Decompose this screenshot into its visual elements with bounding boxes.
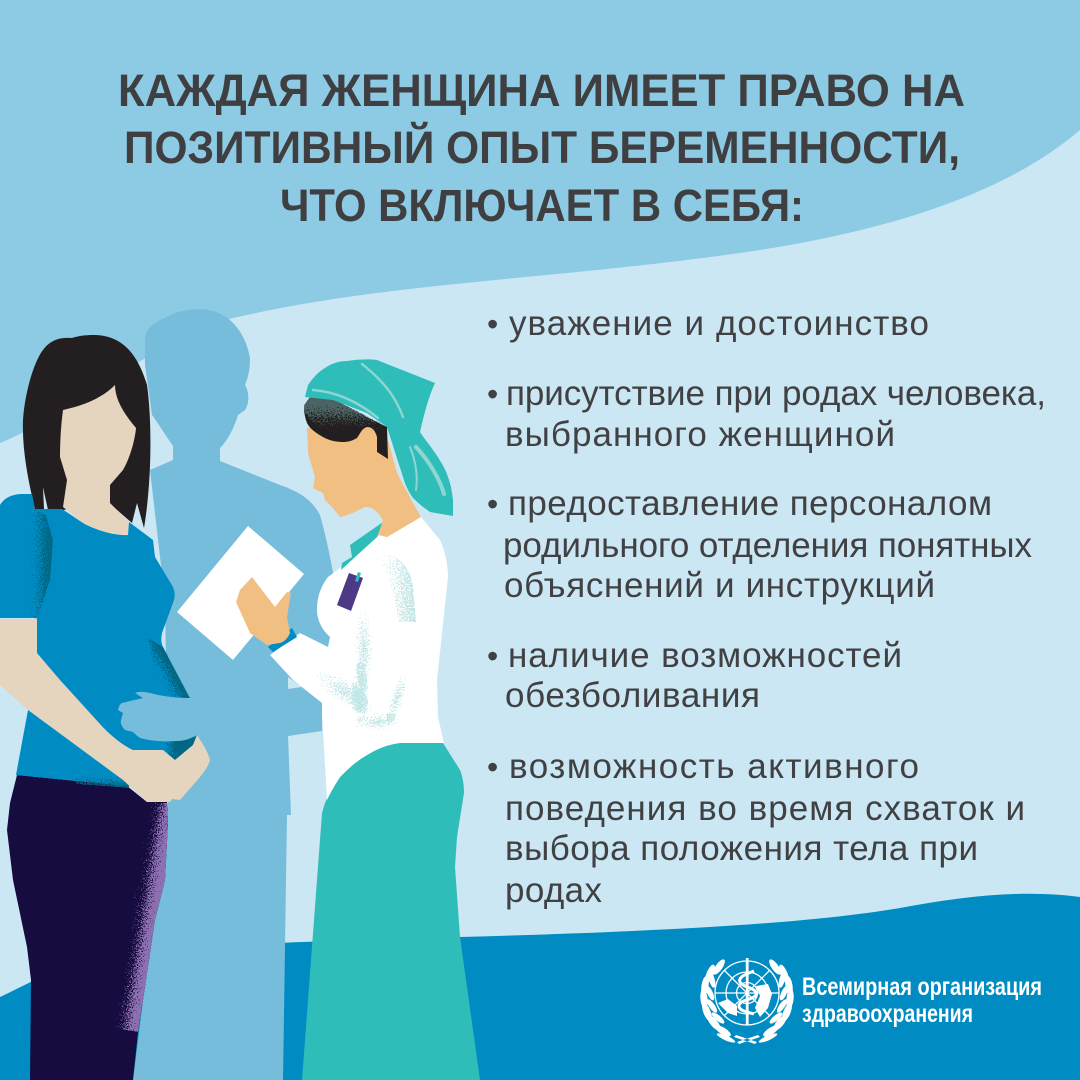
nurse xyxy=(177,359,480,1080)
item: pain relief: • xyxy=(487,638,498,674)
item: respect and dignity: уважение и достоинство xyxy=(509,304,929,343)
item: mobility and birth position: поведения во время схваток и xyxy=(505,789,1025,828)
nurse blouse xyxy=(270,517,448,800)
item: clear communication: объяснений и инструкций xyxy=(504,566,935,605)
item: mobility and birth position xyxy=(487,747,1025,910)
WHO name xyxy=(802,973,1042,1028)
sleeve stipple arm xyxy=(310,608,412,733)
item: clear communication: предоставление персоналом xyxy=(508,484,992,523)
top wave xyxy=(0,0,1080,443)
title xyxy=(118,65,965,231)
pregnant woman xyxy=(0,335,240,1080)
item: respect and dignity: • xyxy=(487,306,498,342)
sleeve stipple shoulder xyxy=(376,555,416,622)
shirt under-hand shading xyxy=(158,737,196,760)
title: ПОЗИТИВНЫЙ ОПЫТ БЕРЕМЕННОСТИ, xyxy=(124,122,960,173)
item: companion of choice: выбранного женщиной xyxy=(505,415,895,454)
man's hand on belly xyxy=(118,692,240,741)
woman's trousers xyxy=(7,775,168,1080)
clipboard paper xyxy=(177,526,304,660)
woman's hair xyxy=(23,335,150,528)
title: ЧТО ВКЛЮЧАЕТ В СЕБЯ: xyxy=(280,180,804,231)
WHO logo xyxy=(699,958,1042,1044)
gap between man's arm and body xyxy=(288,677,302,689)
WHO emblem xyxy=(699,958,795,1044)
nurse face and neck xyxy=(307,420,421,537)
item: pain relief xyxy=(487,636,902,715)
item: mobility and birth position: возможность активного xyxy=(509,747,919,786)
item: mobility and birth position: выбора положения тела при xyxy=(505,829,978,868)
woman's arm xyxy=(0,619,210,802)
scarf highlights xyxy=(313,364,444,494)
item: clear communication xyxy=(487,484,1032,605)
headscarf xyxy=(305,359,453,516)
watch cuff xyxy=(268,628,297,652)
collar xyxy=(341,522,383,570)
item: mobility and birth position: родах xyxy=(505,871,602,910)
nurse skirt xyxy=(302,743,480,1080)
woman's shirt xyxy=(0,494,197,786)
item: pain relief: обезболивания xyxy=(505,676,760,715)
nurse hair xyxy=(304,398,388,459)
WHO name: здравоохранения xyxy=(802,1000,973,1028)
nurse hand xyxy=(236,577,291,645)
item: mobility and birth position: • xyxy=(487,749,498,785)
bottom wave xyxy=(0,894,1080,1080)
man silhouette xyxy=(133,309,340,1080)
shirt sleeve shading xyxy=(24,495,53,620)
item: clear communication: • xyxy=(487,486,498,522)
title: КАЖДАЯ ЖЕНЩИНА ИМЕЕТ ПРАВО НА xyxy=(118,65,965,116)
item: companion of choice xyxy=(487,374,1046,454)
item: clear communication: родильного отделения понятных xyxy=(503,526,1032,565)
item: companion of choice: присутствие при родах человека, xyxy=(506,374,1046,413)
trousers stipple shading xyxy=(114,803,168,1032)
woman's face and neck xyxy=(60,385,136,535)
bullet list xyxy=(487,304,1046,910)
shirt hem shading xyxy=(76,770,130,788)
name badge xyxy=(337,572,363,611)
nurse hair highlight xyxy=(304,397,388,435)
item: companion of choice: • xyxy=(487,376,498,412)
item: pain relief: наличие возможностей xyxy=(508,636,902,675)
shirt belly shading xyxy=(148,638,190,699)
